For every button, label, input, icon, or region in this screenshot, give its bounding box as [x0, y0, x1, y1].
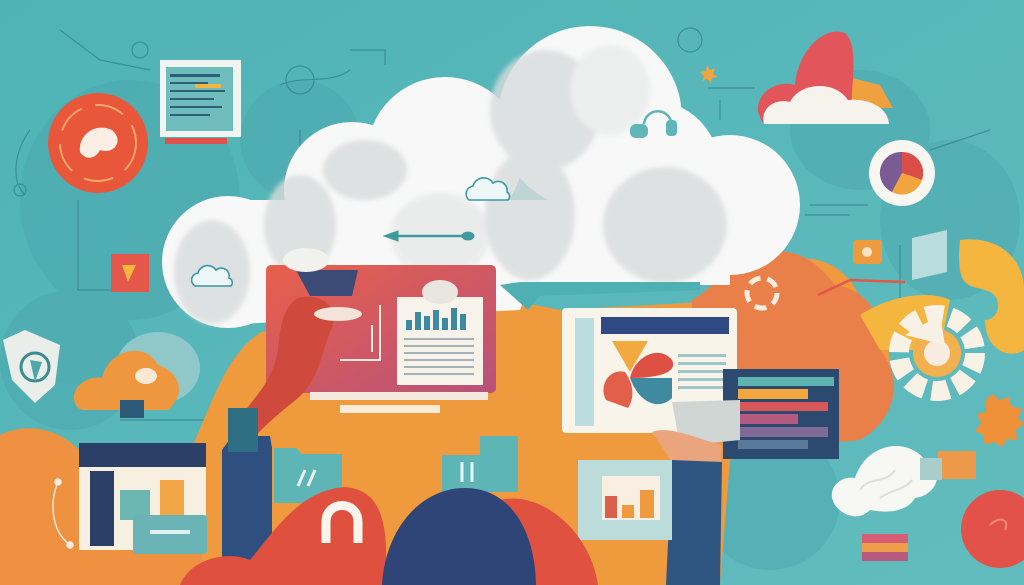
icon: small cloud center	[466, 178, 510, 200]
icon: small orange gear	[975, 394, 1024, 447]
arrow red	[818, 280, 905, 295]
panel: dashboard card	[562, 308, 737, 433]
icon: brain cloud	[832, 446, 976, 516]
icon: top right red cloud	[758, 32, 893, 124]
panel: laptop screen with chart	[266, 265, 496, 413]
right orange cloud	[692, 251, 894, 450]
icon: pale document right	[912, 230, 947, 280]
orange central mass	[180, 258, 890, 585]
icon: gear shield left	[3, 330, 60, 403]
thin circuit lines	[14, 28, 990, 420]
icon: small cloud left	[192, 266, 232, 286]
cloud grey lobes	[174, 45, 727, 324]
icon: link node lines	[53, 479, 73, 548]
chart card	[397, 280, 483, 385]
orange left cloud	[0, 428, 203, 585]
icon: orange small tile	[853, 240, 882, 264]
icon: double arrow	[384, 231, 474, 241]
red arm reaching to screen	[236, 248, 362, 442]
icon: white horseshoe	[326, 506, 358, 543]
icon: red small square	[111, 254, 149, 292]
sleeve cuff	[228, 408, 258, 452]
teal folder cards	[274, 436, 518, 503]
icon: headphones cloud	[630, 111, 677, 138]
panel: tablet with bars	[723, 369, 839, 459]
folder marks	[298, 462, 472, 486]
icon: large gear	[899, 315, 975, 391]
icon: red circle bottom right	[961, 490, 1024, 568]
icon: striped tile bottom right	[862, 534, 908, 561]
panel: lower left window	[79, 443, 207, 554]
panel: small chart monitor	[578, 460, 672, 540]
red cloud bottom	[180, 487, 386, 585]
icon: red orange circle	[48, 93, 148, 193]
yellow swirl	[860, 239, 1024, 354]
icon: dashed ring on orange cloud	[747, 278, 777, 308]
left small orange cloud	[74, 332, 200, 418]
main cloud	[162, 26, 800, 328]
icon: donut pie chart	[869, 140, 935, 206]
person head	[382, 488, 536, 585]
left blue sleeve	[222, 408, 272, 585]
right hand holding card	[652, 400, 740, 585]
icon: small flower	[700, 65, 718, 83]
panel: document top left	[160, 60, 241, 144]
red shape behind person	[500, 498, 598, 585]
pie chart	[603, 341, 673, 408]
